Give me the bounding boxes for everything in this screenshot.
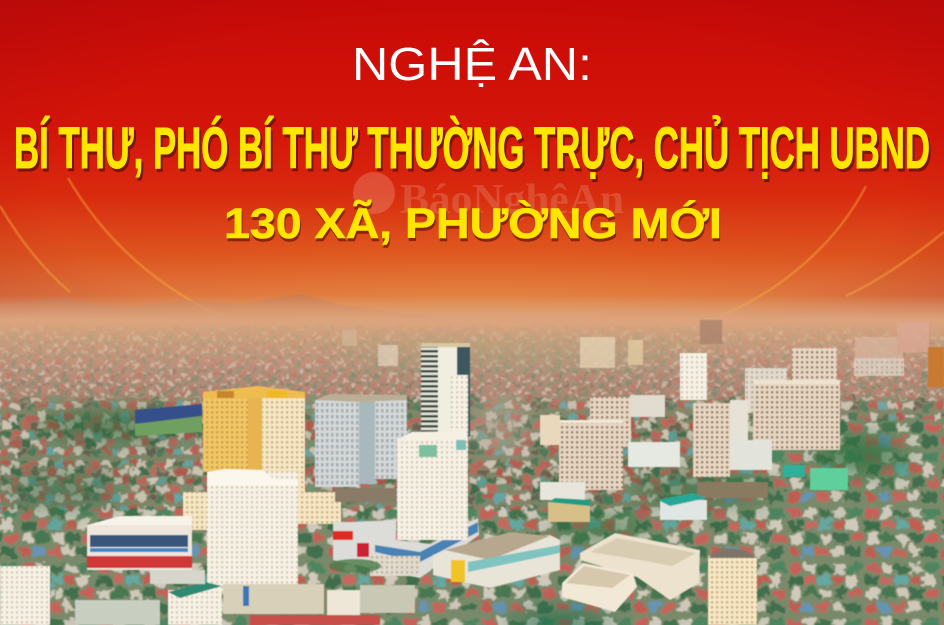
office block, left: [87, 516, 192, 570]
tower block: large beige: [753, 380, 840, 450]
orange tower, far right: [928, 347, 944, 387]
title line 3: 130 XÃ, PHƯỜNG MỚI: [225, 202, 723, 251]
white centre hotel tower: [397, 431, 468, 540]
tall striped tower: [421, 343, 470, 436]
house roofs texture: [0, 326, 944, 625]
city base: [0, 295, 944, 625]
decorative golden arcs: [0, 178, 944, 318]
grey twin towers: [315, 394, 407, 487]
shopping block, right of centre: [433, 532, 560, 588]
far towers, right: [342, 320, 929, 376]
red sky background: [0, 0, 944, 345]
stadium: [135, 404, 202, 436]
golden tower: [203, 386, 305, 500]
residential towers, right: [680, 348, 837, 413]
white front hotel tower: [207, 469, 298, 594]
palm trees, centre: [329, 559, 381, 573]
muted tone over the houses: [0, 326, 944, 625]
atmospheric haze: [0, 295, 944, 420]
title line 1: NGHỆ AN:: [352, 38, 592, 90]
cream building, lower right: [562, 533, 700, 612]
podium, low buildings around the towers: [183, 488, 397, 530]
title line 3: 130 XÃ, PHƯỜNG MỚI: [224, 199, 722, 248]
watermark: Báo Nghệ An: BáoNghệAn: [400, 177, 624, 223]
podium, front of hotel: [223, 584, 324, 614]
low buildings, bottom left: [0, 566, 415, 625]
green and teal low buildings: [548, 465, 848, 522]
shopping podium, centre: [333, 518, 479, 578]
tree masses: [0, 340, 905, 625]
tower blocks: twin beige: [540, 395, 680, 500]
all buildings: [0, 320, 944, 625]
distant mountains: [0, 294, 470, 335]
tower block: white middle: [693, 400, 772, 477]
cream tower, bottom right: [708, 548, 757, 625]
